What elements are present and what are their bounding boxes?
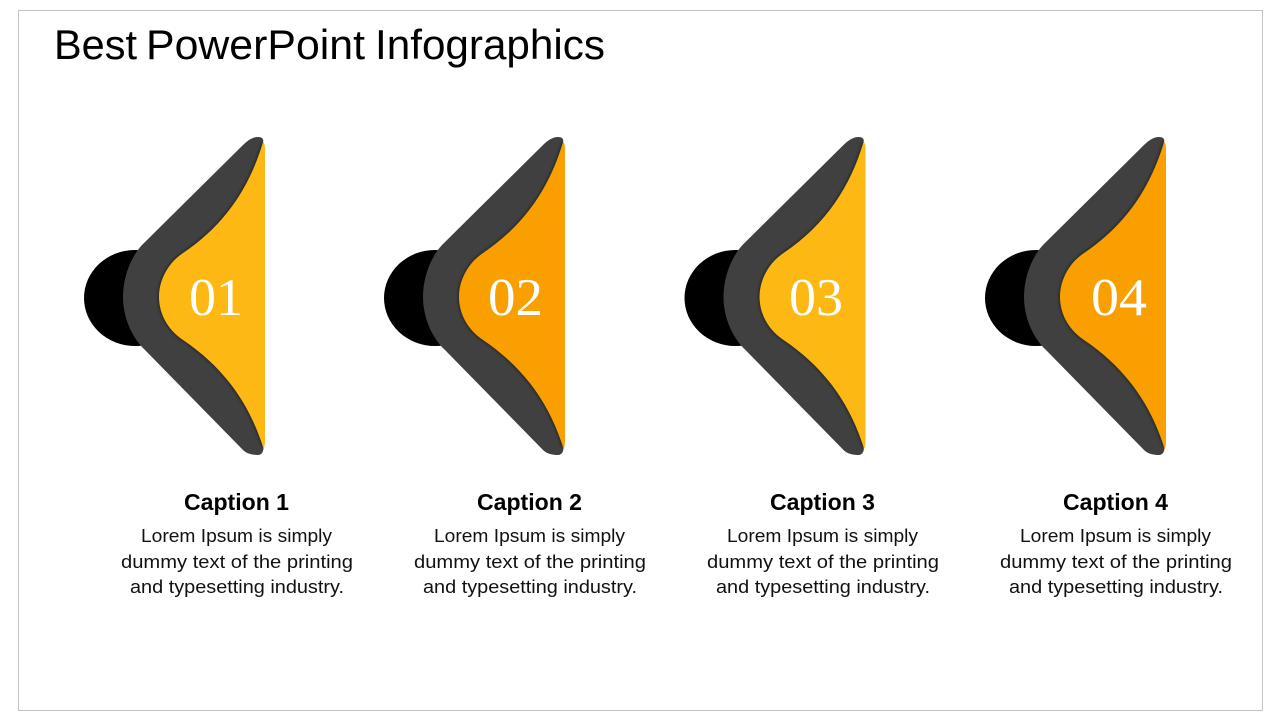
yellow fill 03 xyxy=(740,141,866,451)
inner edge shading 04 xyxy=(1060,142,1164,447)
heading: caption 4: Caption 4 xyxy=(1063,489,1168,515)
inner edge shading 01 xyxy=(159,142,263,447)
body text 2: and typesetting industry. xyxy=(423,577,637,597)
text block: caption 3 xyxy=(707,489,939,597)
body text 3: Lorem Ipsum is simply xyxy=(727,526,918,546)
body text 2: Lorem Ipsum is simply xyxy=(434,526,625,546)
orange fill 02 xyxy=(440,141,565,451)
inner edge shading 02 xyxy=(459,142,563,447)
title: Infographics xyxy=(375,21,605,68)
yellow fill 01 xyxy=(140,141,265,451)
title: Best xyxy=(54,21,137,68)
body text 1: dummy text of the printing xyxy=(121,552,353,572)
body text 2: dummy text of the printing xyxy=(414,552,646,572)
icon: black circle 01 xyxy=(84,250,186,346)
number 02: 02 xyxy=(488,269,543,327)
text block: caption 1 xyxy=(121,489,353,597)
panel: step 01 graphic xyxy=(84,137,265,455)
icon: black circle 04 xyxy=(985,250,1087,346)
panel: step 03 graphic xyxy=(684,137,866,455)
panel: step 04 graphic xyxy=(985,137,1166,455)
body text 3: and typesetting industry. xyxy=(716,577,930,597)
body text 3: dummy text of the printing xyxy=(707,552,939,572)
body text 3 xyxy=(707,526,939,597)
body text 4: dummy text of the printing xyxy=(1000,552,1232,572)
dark chevron 04 xyxy=(1024,137,1164,455)
body text 1: and typesetting industry. xyxy=(130,577,344,597)
body text 1: Lorem Ipsum is simply xyxy=(141,526,332,546)
number 01: 01 xyxy=(189,269,243,327)
orange fill 04 xyxy=(1041,141,1166,451)
title: PowerPoint xyxy=(146,21,365,68)
text block: caption 4 xyxy=(1000,489,1232,597)
title xyxy=(54,21,605,68)
body text 1 xyxy=(121,526,353,597)
heading: caption 1: Caption 1 xyxy=(184,489,289,515)
heading: caption 3: Caption 3 xyxy=(770,489,875,515)
body text 4 xyxy=(1000,526,1232,597)
number 04: 04 xyxy=(1091,269,1147,327)
inner edge shading 03 xyxy=(760,142,864,447)
panel: step 02 graphic xyxy=(384,137,565,455)
heading: caption 2: Caption 2 xyxy=(477,489,582,515)
dark chevron 01 xyxy=(123,137,263,455)
dark chevron 03 xyxy=(724,137,864,455)
body text 2 xyxy=(414,526,646,597)
body text 4: Lorem Ipsum is simply xyxy=(1020,526,1211,546)
text block: caption 2 xyxy=(414,489,646,597)
icon: black circle 02 xyxy=(384,250,486,346)
body text 4: and typesetting industry. xyxy=(1009,577,1223,597)
number 03: 03 xyxy=(789,269,843,327)
icon: black circle 03 xyxy=(684,250,786,346)
dark chevron 02 xyxy=(423,137,563,455)
